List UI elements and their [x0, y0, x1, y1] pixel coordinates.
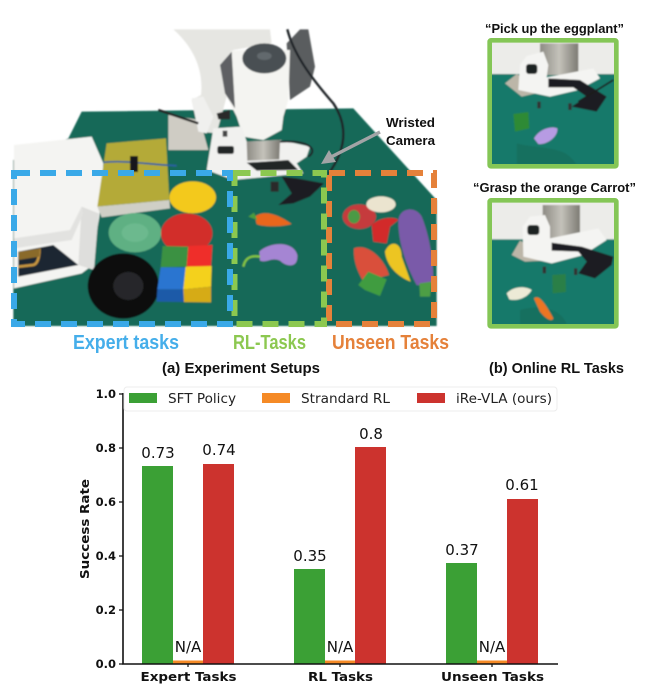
y axis ticks and labels: 0.0 — [96, 657, 116, 671]
gray arrow pointing to wrist camera — [321, 132, 380, 164]
value labels: 0.73 — [141, 444, 175, 462]
value labels: 0.61 — [505, 476, 539, 494]
value labels: 0.74 — [202, 441, 236, 459]
y axis ticks and labels — [96, 387, 123, 671]
value labels: N/A — [479, 638, 506, 656]
x axis ticks and labels: Expert Tasks — [140, 669, 236, 684]
Expert Tasks bars — [142, 464, 234, 664]
y axis ticks and labels: 1.0 — [96, 387, 116, 401]
Unseen Tasks bars — [446, 499, 538, 664]
plates and blocks — [88, 181, 216, 319]
value labels — [141, 425, 539, 656]
x axis ticks and labels: RL Tasks — [308, 669, 373, 684]
y axis title: Success Rate — [77, 479, 92, 579]
label: RL-Tasks: RL-Tasks — [233, 332, 306, 354]
heading: grasp the orange carrot: “Grasp the orange Carrot” — [473, 181, 636, 195]
green photo frame — [490, 200, 616, 326]
x axis ticks and labels: Unseen Tasks — [441, 669, 544, 684]
panel: carrot task photo — [490, 200, 616, 326]
bar chart: success rate — [77, 387, 558, 684]
green photo frame — [490, 40, 616, 166]
panel: experiment setup photo — [13, 29, 437, 326]
x axis ticks and labels — [140, 664, 544, 684]
y axis ticks and labels: 0.8 — [96, 441, 116, 455]
panel: eggplant task photo — [490, 40, 616, 166]
legend: iRe-VLA (ours) — [456, 392, 552, 407]
value labels: 0.37 — [445, 541, 479, 559]
value labels: 0.35 — [293, 547, 327, 565]
dashed box: orange unseen tasks — [329, 173, 434, 324]
RL Tasks bars — [294, 447, 386, 664]
plush unseen objects — [343, 196, 433, 297]
value labels: N/A — [175, 638, 202, 656]
legend — [124, 387, 557, 411]
heading: pick up the eggplant: “Pick up the eggplant” — [485, 22, 624, 36]
value labels: 0.8 — [359, 425, 383, 443]
label: wristed camera: Wristed — [386, 115, 435, 130]
legend: SFT Policy — [168, 392, 236, 407]
y axis ticks and labels: 0.6 — [96, 495, 116, 509]
legend: Strandard RL — [301, 392, 391, 407]
y axis ticks and labels: 0.2 — [96, 603, 116, 617]
robot arm — [158, 29, 343, 205]
green table mat — [13, 108, 437, 326]
label: wristed camera: Camera — [386, 133, 436, 148]
yellow book — [97, 138, 177, 217]
caption: Experiment Setups: (a) Experiment Setups — [162, 360, 320, 377]
dashed box: green RL tasks — [234, 173, 324, 324]
label: Expert tasks: Expert tasks — [73, 332, 179, 354]
white storage box — [14, 137, 103, 288]
value labels: N/A — [327, 638, 354, 656]
label: Unseen Tasks: Unseen Tasks — [332, 332, 449, 354]
dashed box: blue expert tasks — [14, 173, 230, 324]
carrot and eggplant — [243, 213, 297, 267]
axes — [123, 393, 558, 664]
caption: Online RL Tasks: (b) Online RL Tasks — [489, 360, 624, 377]
y axis ticks and labels: 0.4 — [96, 549, 116, 563]
